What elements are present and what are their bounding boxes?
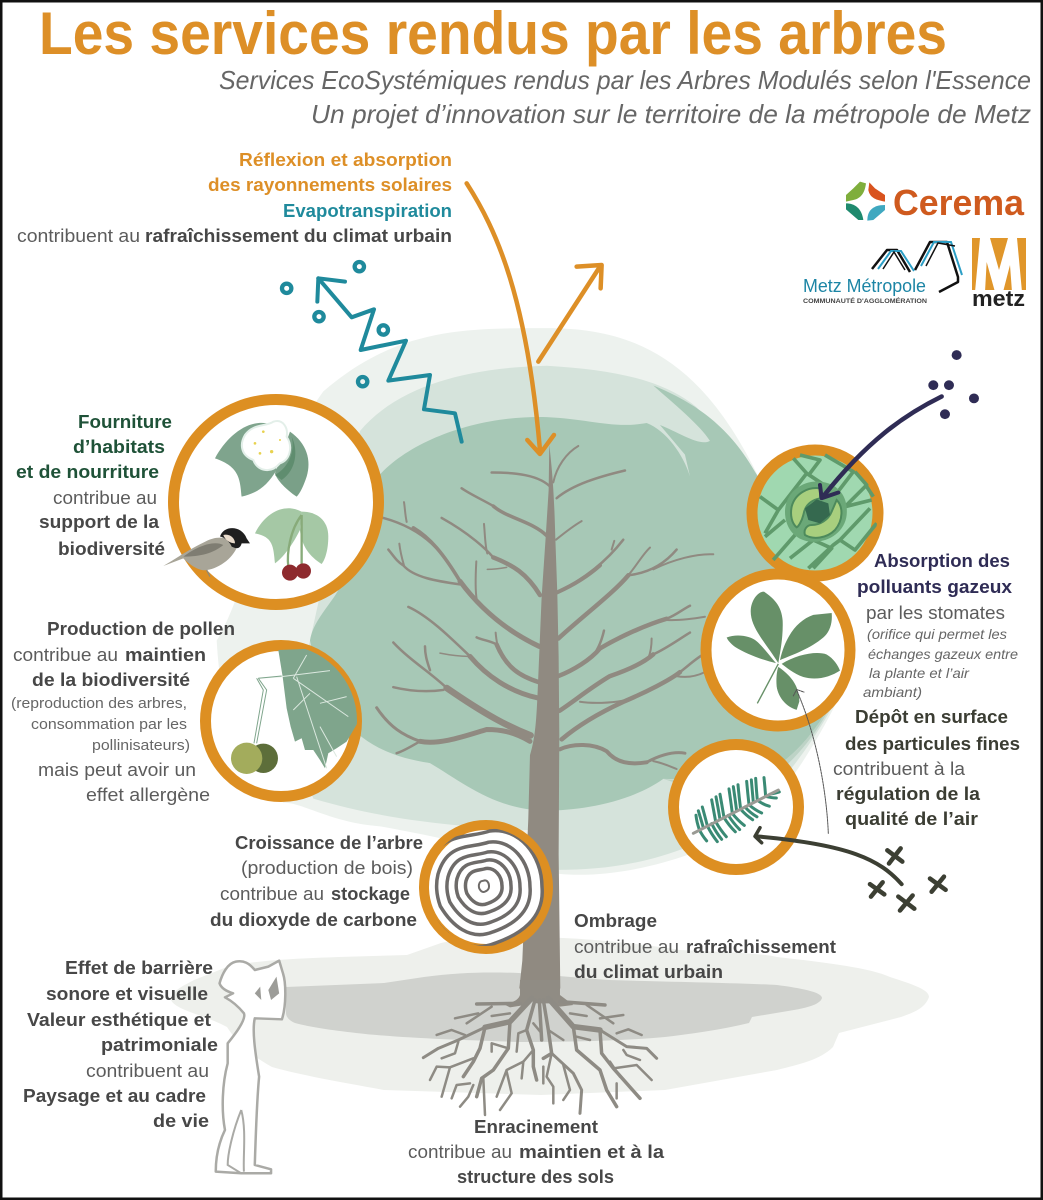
icon: tree rings bbox=[424, 831, 542, 947]
logo: Metz Métropole: COMMUNAUTÉ D'AGGLOMÉRATION bbox=[803, 297, 927, 305]
ground shadow bbox=[171, 937, 929, 1095]
text: enracinement: maintien et à la bbox=[519, 1142, 665, 1162]
text: absorption des polluants: polluants gazeux bbox=[857, 577, 1012, 597]
text: production de pollen: mais peut avoir un bbox=[38, 760, 196, 780]
logo: Metz Métropole: Metz Métropole bbox=[803, 276, 926, 296]
text: effet de barrière: de vie bbox=[153, 1111, 209, 1131]
text: dépôt des particules: Dépôt en surface bbox=[855, 707, 1008, 727]
text: fourniture d'habitats: et de nourriture bbox=[16, 462, 159, 482]
text: effet de barrière: contribuent au bbox=[86, 1061, 209, 1081]
text: ombrage: contribue au bbox=[574, 937, 679, 957]
icon: plane tree leaf and seeds bbox=[231, 647, 363, 774]
text: dépôt des particules bbox=[833, 707, 1020, 829]
text: production de pollen: de la biodiversité bbox=[32, 670, 190, 690]
text: réflexion et évapotranspiration: rafraîchissement du climat urbain bbox=[145, 226, 452, 246]
text: enracinement: Enracinement bbox=[474, 1117, 598, 1137]
text: dépôt des particules: régulation de la bbox=[836, 784, 981, 804]
text: dépôt des particules: contribuent à la bbox=[833, 759, 966, 779]
text: fourniture d'habitats bbox=[16, 412, 172, 559]
tree trunk and branches bbox=[377, 445, 713, 988]
title: Les services rendus par les arbres bbox=[39, 0, 947, 67]
text: dépôt des particules: qualité de l’air bbox=[845, 809, 978, 829]
text: fourniture d'habitats: Fourniture bbox=[78, 412, 172, 432]
text: effet de barrière: Paysage et au cadre bbox=[23, 1086, 206, 1106]
text: absorption des polluants: par les stomates bbox=[866, 603, 1005, 623]
text: production de pollen bbox=[11, 619, 235, 805]
text: croissance de l'arbre: stockage bbox=[331, 884, 410, 904]
subtitle bbox=[219, 65, 1031, 129]
panel: habitats circle bbox=[163, 400, 378, 604]
text: effet de barrière: sonore et visuelle bbox=[46, 984, 208, 1004]
roots bbox=[423, 980, 657, 1115]
panel: stomata circle bbox=[752, 450, 878, 576]
text: absorption des polluants: Absorption des bbox=[874, 551, 1010, 571]
icon: chestnut leaf bbox=[727, 592, 840, 710]
text: ombrage: du climat urbain bbox=[574, 962, 723, 982]
logo: Metz Métropole bbox=[803, 242, 962, 305]
text: ombrage: Ombrage bbox=[574, 911, 657, 931]
text: effet de barrière: Effet de barrière bbox=[65, 958, 213, 978]
text: ombrage: rafraîchissement bbox=[686, 937, 836, 957]
text: fourniture d'habitats: biodiversité bbox=[58, 539, 165, 559]
text: croissance de l'arbre: (production de bois) bbox=[241, 858, 413, 878]
text: réflexion et évapotranspiration: contribuent au bbox=[17, 226, 140, 246]
text: enracinement: contribue au bbox=[408, 1142, 512, 1162]
text: dépôt des particules: des particules fines bbox=[845, 734, 1020, 754]
arrow: particules fines bbox=[755, 689, 946, 911]
text: production de pollen: Production de pollen bbox=[47, 619, 235, 639]
text: croissance de l'arbre: contribue au bbox=[220, 884, 324, 904]
panel: pollen circle bbox=[206, 646, 363, 796]
arrow: polluants gazeux bbox=[820, 350, 979, 498]
text: production de pollen: effet allergène bbox=[86, 785, 210, 805]
arrow: évapotranspiration bbox=[282, 262, 462, 442]
panel: conifer circle bbox=[674, 744, 798, 870]
text: croissance de l'arbre bbox=[210, 833, 423, 930]
text: réflexion et évapotranspiration: Réflexion et absorption bbox=[239, 150, 452, 170]
text: production de pollen: pollinisateurs) bbox=[92, 737, 190, 754]
text: production de pollen: maintien bbox=[125, 645, 206, 665]
text: enracinement: structure des sols bbox=[457, 1167, 614, 1187]
logo: ville de Metz bbox=[972, 238, 1026, 311]
text: fourniture d'habitats: contribue au bbox=[53, 488, 157, 508]
icon: conifer branch bbox=[693, 778, 779, 842]
subtitle: Un projet d’innovation sur le territoire de la métropole de Metz bbox=[311, 99, 1031, 129]
panel: tree rings circle bbox=[424, 825, 548, 949]
text: production de pollen: consommation par les bbox=[31, 716, 187, 733]
canopy foliage bbox=[217, 328, 853, 875]
icon: stomata bbox=[760, 455, 877, 568]
text: fourniture d'habitats: d’habitats bbox=[73, 437, 165, 457]
icon: flower, cherries and bird bbox=[163, 421, 328, 581]
text: réflexion et évapotranspiration: des rayonnements solaires bbox=[208, 175, 452, 195]
logo: Cerema: Cerema bbox=[893, 182, 1025, 223]
text: croissance de l'arbre: du dioxyde de carbone bbox=[210, 910, 417, 930]
text: réflexion et évapotranspiration bbox=[17, 150, 452, 246]
icon: person silhouette bbox=[216, 961, 285, 1173]
text: réflexion et évapotranspiration: Evapotranspiration bbox=[283, 201, 452, 221]
panel: chestnut leaf circle bbox=[706, 574, 850, 726]
text: croissance de l'arbre: Croissance de l’arbre bbox=[235, 833, 423, 853]
text: absorption des polluants: (orifice qui permet les bbox=[867, 626, 1007, 642]
subtitle: Services EcoSystémiques rendus par les Arbres Modulés selon l'Essence bbox=[219, 65, 1031, 95]
text: effet de barrière: Valeur esthétique et bbox=[27, 1010, 211, 1030]
text: production de pollen: (reproduction des arbres, bbox=[11, 695, 187, 712]
text: enracinement bbox=[408, 1117, 665, 1187]
text: ombrage bbox=[574, 911, 836, 982]
text: fourniture d'habitats: support de la bbox=[39, 512, 160, 532]
arrow: rayonnement solaire bbox=[467, 183, 602, 454]
text: production de pollen: contribue au bbox=[13, 645, 118, 665]
logo: ville de Metz: metz bbox=[972, 286, 1025, 311]
text: absorption des polluants bbox=[857, 551, 1018, 700]
text: absorption des polluants: échanges gazeux entre bbox=[868, 646, 1018, 662]
text: absorption des polluants: ambiant) bbox=[863, 684, 922, 700]
text: absorption des polluants: la plante et l’air bbox=[869, 665, 970, 681]
text: effet de barrière: patrimoniale bbox=[101, 1035, 218, 1055]
text: effet de barrière bbox=[23, 958, 218, 1131]
